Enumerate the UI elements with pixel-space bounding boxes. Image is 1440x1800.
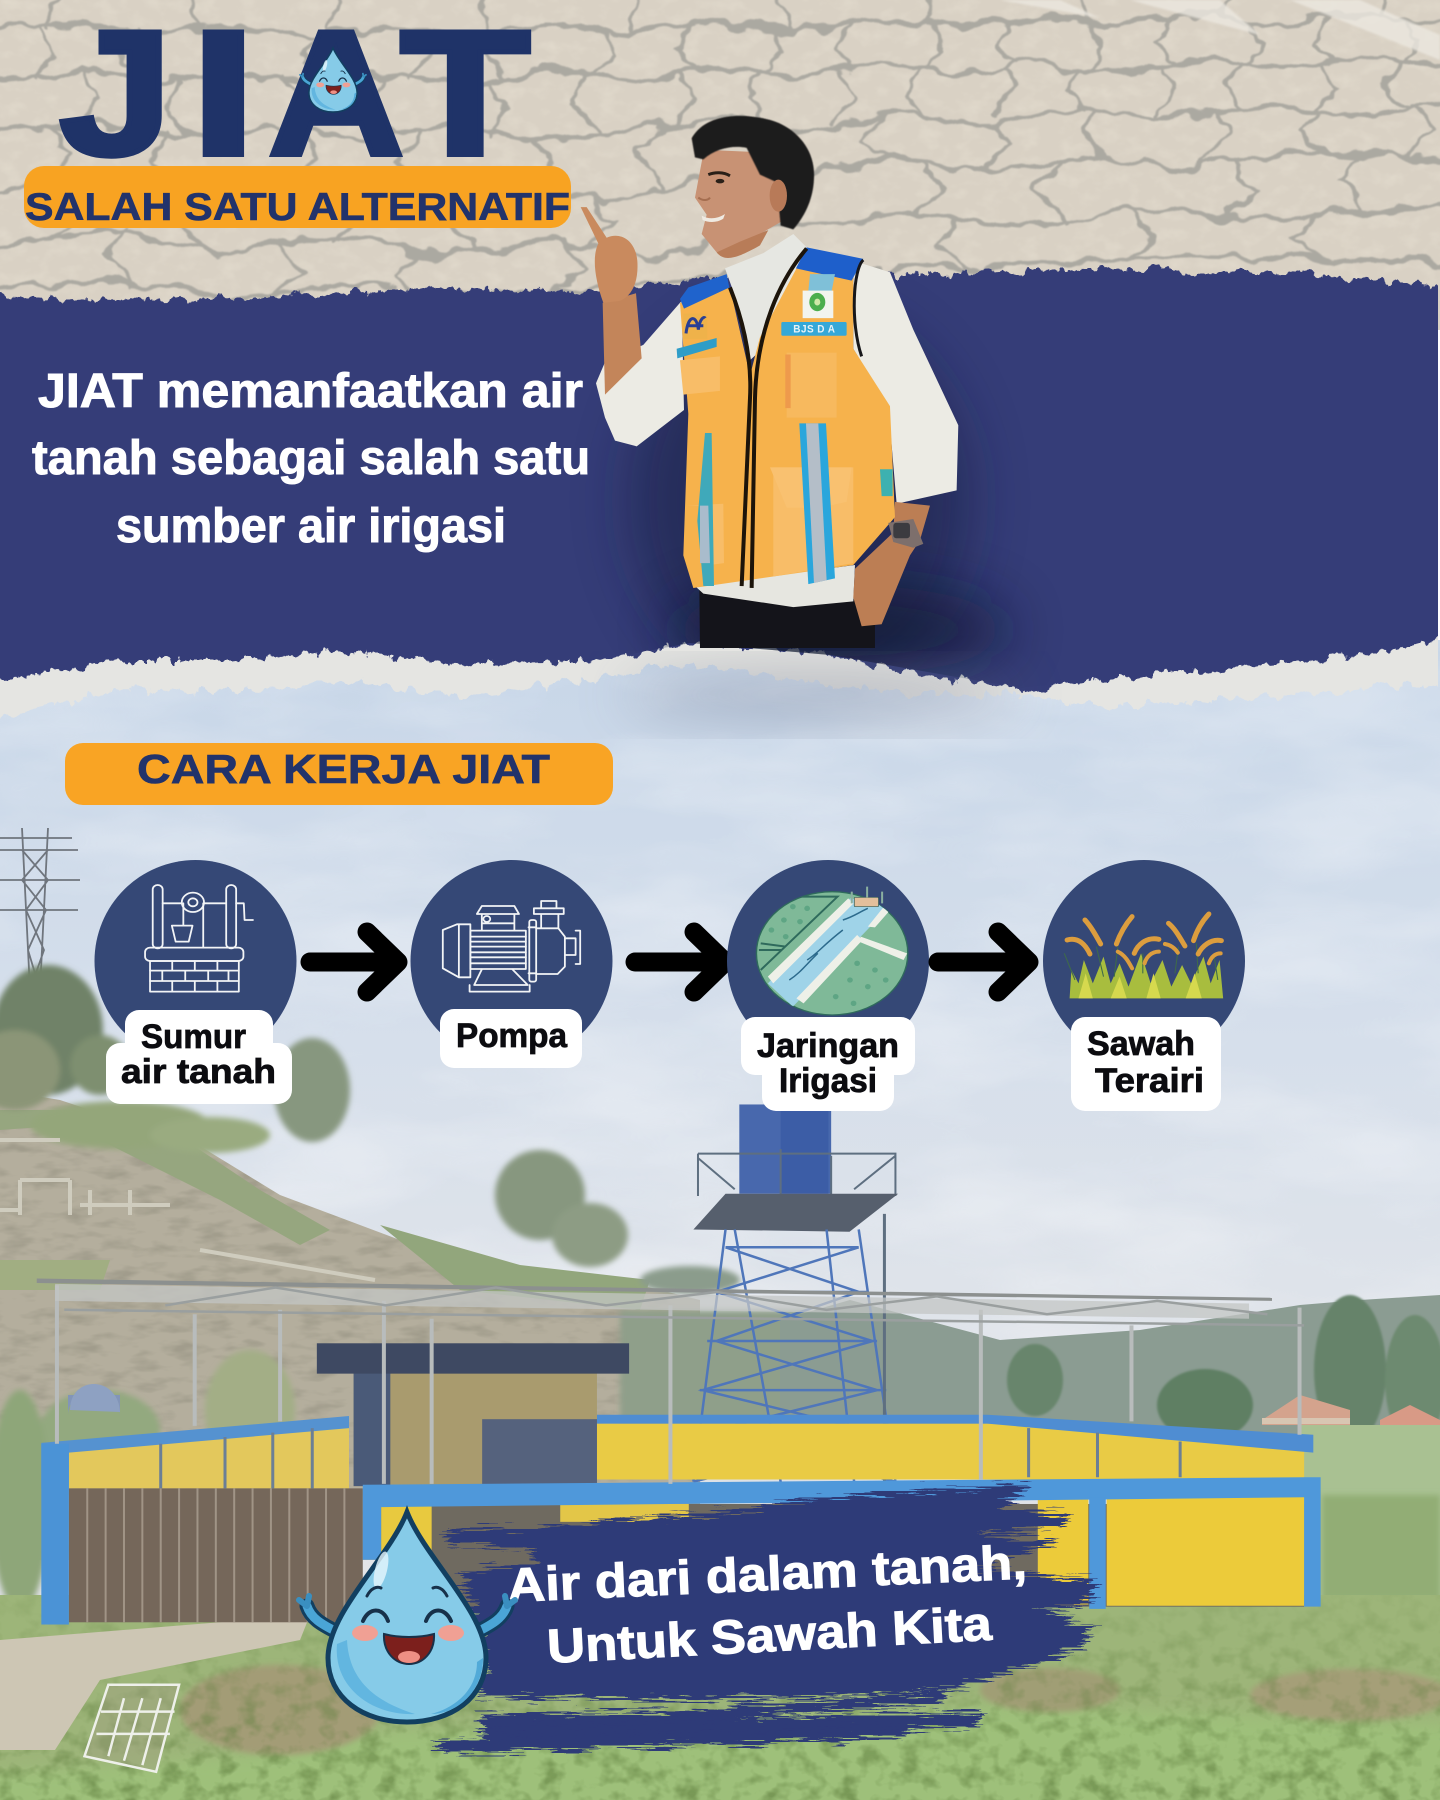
metal gate bbox=[69, 1488, 363, 1622]
pump house building with roof and fenced walls bbox=[37, 1279, 1321, 1625]
badge: cara kerja jiat bbox=[65, 743, 613, 805]
blue pillar left bbox=[41, 1444, 69, 1625]
badge: salah satu alternatif bbox=[24, 166, 571, 229]
right forearm and hand bbox=[853, 502, 930, 626]
drain grate bbox=[84, 1685, 179, 1772]
label: pompa bbox=[440, 1009, 582, 1068]
icon: large water drop mascot bbox=[299, 1512, 515, 1722]
label: sumur air tanah bbox=[106, 1010, 292, 1104]
label: jaringan irigasi: Jaringan bbox=[757, 1027, 899, 1065]
label: sawah terairi: Terairi bbox=[1095, 1062, 1204, 1100]
navy torn band bbox=[0, 268, 1440, 692]
roof posts bbox=[57, 1285, 1300, 1484]
vest shoulders bbox=[796, 247, 863, 281]
icon: pump bbox=[443, 901, 580, 992]
step 3: irrigation network bbox=[727, 860, 929, 1111]
head bbox=[692, 116, 814, 258]
intro text: tanah sebagai salah satu bbox=[32, 432, 590, 485]
arrow 2 bbox=[635, 932, 725, 992]
badge: PU logo and name bbox=[677, 314, 717, 358]
left sleeve bbox=[596, 301, 684, 446]
neck and shirt front bbox=[725, 234, 807, 360]
badge: emblem bbox=[803, 291, 833, 318]
arrow 3 bbox=[938, 932, 1029, 992]
shadow on sky below person bbox=[620, 673, 1020, 717]
intro text: sumber air irigasi bbox=[116, 500, 506, 553]
badge: cara kerja jiat: CARA KERJA JIAT bbox=[137, 746, 550, 792]
background: hillside and trees bbox=[0, 965, 810, 1610]
shirt hem bbox=[695, 565, 855, 607]
background: rice field and foreground plants bbox=[0, 1425, 1440, 1800]
water tower bbox=[693, 1104, 898, 1484]
step 4: irrigated rice field bbox=[1043, 860, 1245, 1111]
right sleeve bbox=[853, 261, 958, 504]
badge: salah satu alternatif: SALAH SATU ALTERNATIF bbox=[25, 186, 570, 229]
label: jaringan irigasi bbox=[741, 1017, 915, 1111]
pants bbox=[699, 588, 875, 648]
step 2: pump bbox=[410, 860, 612, 1068]
tagline text bbox=[506, 1536, 1028, 1674]
arrow 1 bbox=[310, 932, 398, 992]
person shadow bbox=[630, 310, 1010, 690]
front wall bbox=[381, 1504, 1304, 1607]
tagline text: Untuk Sawah Kita bbox=[546, 1598, 993, 1674]
back wall: yellow with blue band bbox=[46, 1417, 349, 1488]
label: sumur air tanah: Sumur bbox=[141, 1018, 246, 1056]
icon: well bbox=[145, 885, 253, 992]
icon: rice plants bbox=[1064, 914, 1223, 998]
vest body bbox=[680, 249, 895, 588]
badge: name tag: BJS D A bbox=[793, 323, 835, 336]
reflective strips bbox=[799, 423, 835, 584]
pump room bbox=[354, 1372, 597, 1486]
pocket flaps bbox=[770, 467, 852, 508]
tagline text: Air dari dalam tanah, bbox=[506, 1536, 1028, 1613]
label: sawah terairi bbox=[1071, 1017, 1221, 1111]
background: electricity pylon bbox=[0, 828, 80, 990]
pale sun-bleached streaks top right bbox=[1000, 0, 1440, 60]
watch bbox=[888, 519, 923, 548]
label: sumur air tanah: air tanah bbox=[121, 1053, 276, 1091]
background: cracked dry earth bbox=[0, 0, 1440, 330]
roof truss bbox=[55, 1284, 1249, 1319]
intro text: JIAT memanfaatkan air bbox=[38, 365, 583, 418]
background: distant mountains and village bbox=[780, 1295, 1440, 1445]
intro text bbox=[32, 365, 590, 553]
left forearm and pointing hand bbox=[603, 293, 642, 395]
torn paper strip bbox=[0, 636, 1438, 718]
icon: irrigation canal bbox=[756, 887, 908, 1015]
logo title JIAT bbox=[59, 0, 530, 193]
step 1: well bbox=[94, 860, 296, 1104]
brush stroke banner bbox=[438, 1483, 1094, 1753]
badge: name tag bbox=[781, 322, 847, 336]
label: sawah terairi: Sawah bbox=[1087, 1025, 1195, 1063]
icon: small water drop mascot bbox=[300, 48, 366, 112]
vest trim and zipper bbox=[730, 248, 807, 588]
hair bbox=[692, 116, 814, 229]
person in reflective vest bbox=[581, 116, 958, 648]
background: sky with clouds bbox=[0, 640, 1440, 1640]
label: jaringan irigasi: Irigasi bbox=[779, 1062, 877, 1100]
label: pompa: Pompa bbox=[456, 1017, 568, 1055]
